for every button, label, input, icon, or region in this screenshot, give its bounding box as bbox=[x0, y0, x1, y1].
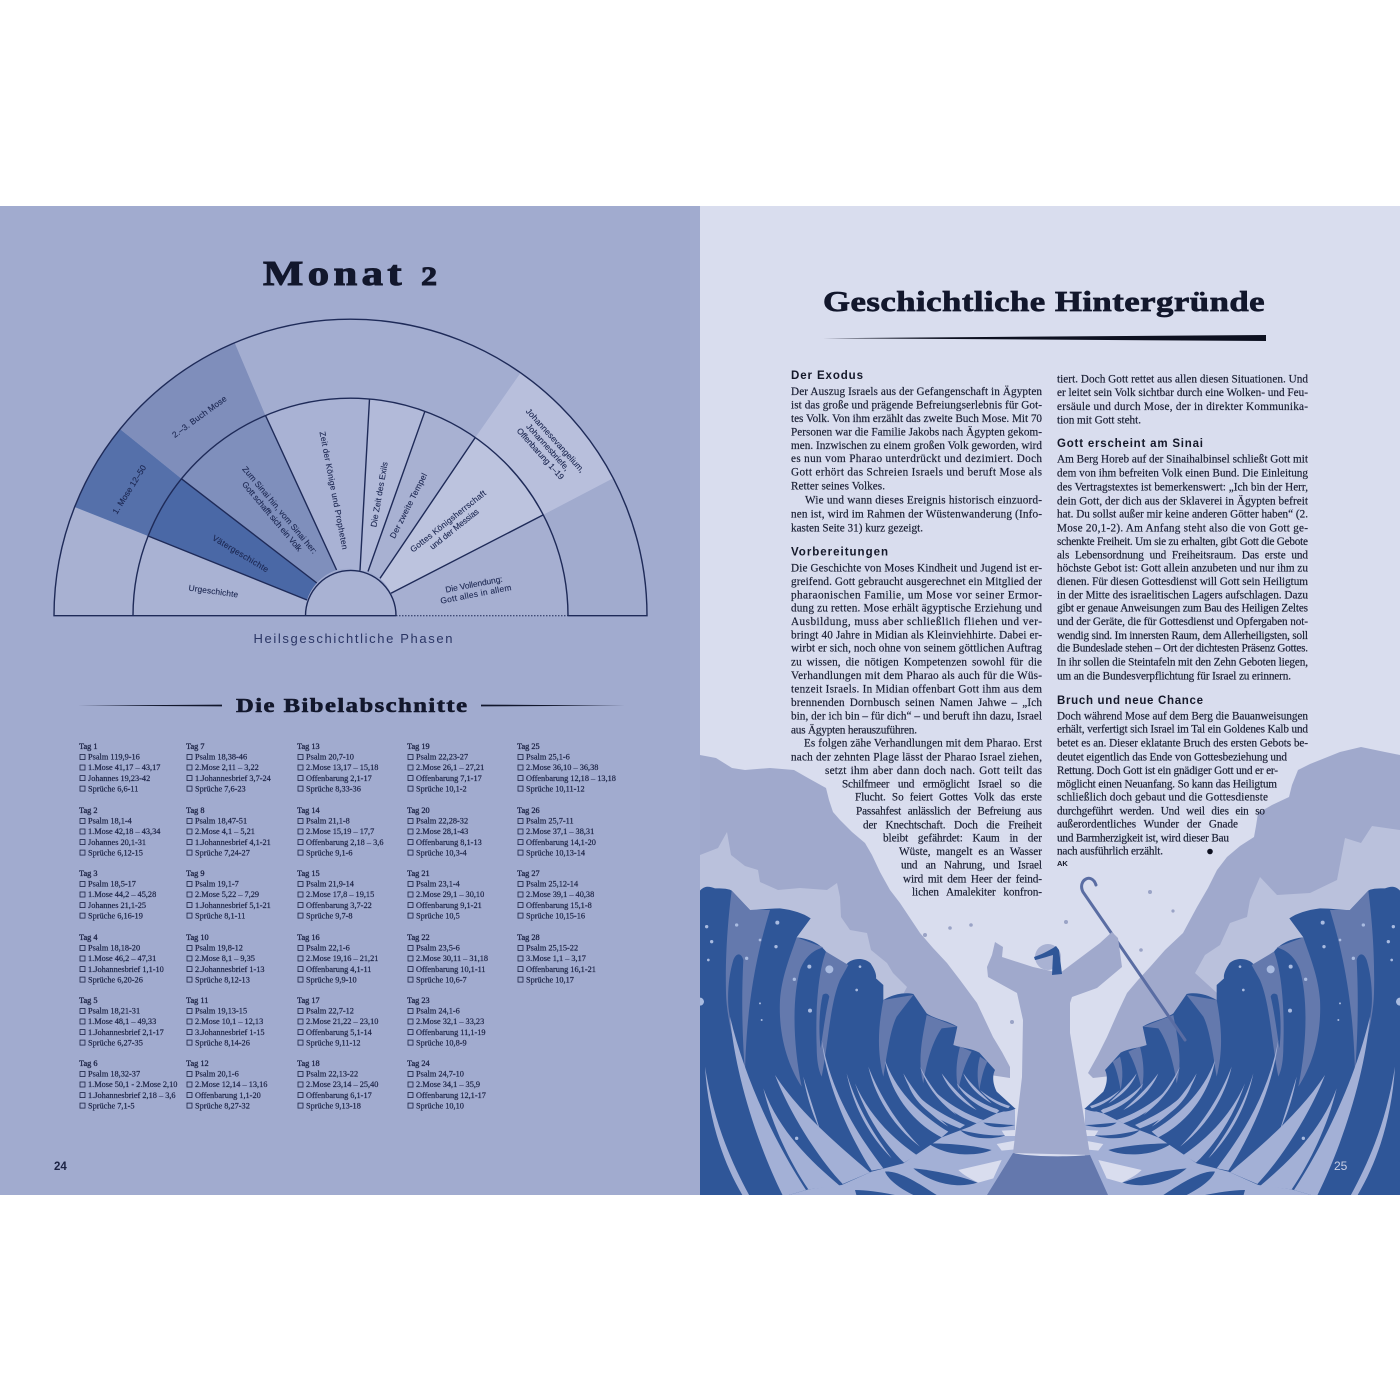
article: Vorbereitungen: Schilfmeer und ermöglicht Israel so die bbox=[842, 778, 1042, 790]
article: Der Exodus: Gott erhört das Schreien Israels und beruft Mose als bbox=[791, 466, 1042, 478]
day 10: Psalm 19,8-12 bbox=[195, 944, 243, 953]
day 23: Offenbarung 11,1-19 bbox=[416, 1028, 486, 1037]
reading list: column 4 bbox=[407, 742, 488, 1110]
subheading: Gott erscheint am Sinai: Gott erscheint am Sinai bbox=[1057, 438, 1203, 450]
day 11: Sprüche 8,14-26 bbox=[195, 1038, 250, 1047]
article: Der Exodus: men. Inzwischen zu einem großen Volk geworden, wird bbox=[791, 440, 1042, 452]
day 18: Psalm 22,13-22 bbox=[306, 1070, 358, 1079]
article: continuation: er leitet sein Volk sichtbar durch eine Wolken- und Feu- bbox=[1057, 387, 1308, 399]
day 13: Tag 13 bbox=[297, 742, 320, 751]
article: Vorbereitungen: zu wissen, die nötigen Kompetenzen sowohl für die bbox=[791, 656, 1042, 668]
day 28: 3.Mose 1,1 – 3,17 bbox=[526, 954, 586, 963]
day 2: 1.Mose 42,18 – 43,34 bbox=[88, 827, 161, 836]
day 25 bbox=[517, 742, 616, 793]
day 9 bbox=[186, 869, 271, 920]
wedge label: Gottes Königsherrschaft: Gottes Königsherrschaft bbox=[408, 487, 488, 554]
article: Gott erscheint am Sinai bbox=[1057, 454, 1309, 682]
article: continuation bbox=[1057, 374, 1308, 426]
day 23 bbox=[407, 996, 486, 1047]
day 2: Tag 2 bbox=[79, 806, 98, 815]
day 14: Offenbarung 2,18 – 3,6 bbox=[306, 838, 384, 847]
day 1: Sprüche 6,6-11 bbox=[88, 784, 138, 793]
day 11: Tag 11 bbox=[186, 996, 208, 1005]
day 16: Sprüche 9,9-10 bbox=[306, 975, 357, 984]
left wave bbox=[696, 887, 1016, 1197]
author initials: AK bbox=[1057, 859, 1068, 868]
day 4: Psalm 18,18-20 bbox=[88, 944, 140, 953]
day 28: Tag 28 bbox=[517, 933, 540, 942]
article: Der Exodus: tes Volk. Von ihm erzählt das zweite Buch Mose. Mit 70 bbox=[791, 413, 1042, 425]
article: Der Exodus: es nun vom Pharao unterdrückt und dezimiert. Doch bbox=[791, 453, 1042, 465]
article: Vorbereitungen: der Knechtschaft. Doch die Freiheit bbox=[863, 820, 1043, 832]
article: Der Exodus: kasten Seite 31) kurz gezeigt. bbox=[791, 522, 923, 534]
title: Monat 2: Monat 2 bbox=[263, 255, 437, 293]
reading list: column 5 bbox=[517, 742, 616, 984]
day 19 bbox=[407, 742, 484, 793]
article: Gott erscheint am Sinai: als Lebensordnung und Freiheitsraum. Das erste und bbox=[1057, 550, 1308, 562]
day 13 bbox=[297, 742, 378, 793]
day 9: Tag 9 bbox=[186, 869, 205, 878]
article: Gott erscheint am Sinai: gibt er genaue Anweisungen zum Bau des Heiligen Zeltes bbox=[1057, 602, 1308, 614]
article: Gott erscheint am Sinai: des Vertragstextes ist bemerkenswert: „Ich bin der Herr, bbox=[1057, 482, 1308, 494]
day 22: Psalm 23,5-6 bbox=[416, 944, 460, 953]
day 4: Sprüche 6,20-26 bbox=[88, 975, 143, 984]
day 4: 1.Mose 46,2 – 47,31 bbox=[88, 954, 156, 963]
article: Vorbereitungen: Die Geschichte von Moses Kindheit und Jugend ist er- bbox=[791, 562, 1042, 574]
day 5: 1.Johannesbrief 2,1-17 bbox=[88, 1028, 164, 1037]
day 26 bbox=[517, 806, 596, 857]
wedge label: Gottes Königsherrschaft: und der Messias bbox=[428, 506, 481, 552]
day 14: Sprüche 9,1-6 bbox=[306, 848, 353, 857]
air spray dots bbox=[923, 890, 1175, 1024]
article: continuation: tion mit Gott steht. bbox=[1057, 414, 1141, 426]
article: Der Exodus: Personen war die Familie Jakobs nach Ägypten gekom- bbox=[791, 426, 1042, 438]
day 5: Tag 5 bbox=[79, 996, 98, 1005]
article: Vorbereitungen: pharaonischen Familie, um Mose vor seiner Ermor- bbox=[791, 590, 1042, 602]
day 12 bbox=[186, 1059, 267, 1110]
day 10: 2.Johannesbrief 1-13 bbox=[195, 965, 265, 974]
day 9: Sprüche 8,1-11 bbox=[195, 911, 245, 920]
wedge label: Johannesevangelium bbox=[509, 406, 587, 488]
day 23: Sprüche 10,8-9 bbox=[416, 1038, 467, 1047]
day 11: 2.Mose 10,1 – 12,13 bbox=[195, 1017, 263, 1026]
article: Vorbereitungen: aus Ägypten herauszuführen. bbox=[791, 724, 917, 736]
day 22: Sprüche 10,6-7 bbox=[416, 975, 467, 984]
day 27: 2.Mose 39,1 – 40,38 bbox=[526, 890, 594, 899]
day 22 bbox=[407, 933, 488, 984]
day 24: Sprüche 10,10 bbox=[416, 1101, 464, 1110]
day 2: Psalm 18,1-4 bbox=[88, 817, 133, 826]
day 17: Offenbarung 5,1-14 bbox=[306, 1028, 373, 1037]
day 10: 2.Mose 8,1 – 9,35 bbox=[195, 954, 255, 963]
day 20: 2.Mose 28,1-43 bbox=[416, 827, 468, 836]
day 5: 1.Mose 48,1 – 49,33 bbox=[88, 1017, 156, 1026]
day 28: Sprüche 10,17 bbox=[526, 975, 574, 984]
outline arcs and spokes bbox=[54, 319, 647, 616]
heading: Geschichtliche Hintergründe bbox=[823, 285, 1266, 341]
day 20 bbox=[407, 806, 482, 857]
day 13: Psalm 20,7-10 bbox=[306, 753, 354, 762]
illustration: parting of the sea bbox=[696, 747, 1400, 1197]
article: Vorbereitungen: Es folgen zähe Verhandlungen mit dem Pharao. Erst bbox=[804, 738, 1043, 750]
article: Vorbereitungen: setzt ihm aber dann doch nach. Gott teilt das bbox=[825, 765, 1042, 777]
article: Der Exodus: Retter seines Volkes. bbox=[791, 480, 885, 492]
day 5: Psalm 18,21-31 bbox=[88, 1007, 140, 1016]
page number 25: 25 bbox=[1334, 1159, 1348, 1173]
article: Bruch und neue Chance: nach ausführlich erzählt. bbox=[1057, 846, 1163, 858]
wedge label: Der zweite Tempel: Der zweite Tempel bbox=[388, 471, 429, 540]
article: Bruch und neue Chance: durchgeführt werden. Und weil dies ein so bbox=[1057, 806, 1265, 818]
article: Vorbereitungen: bleibt gefährdet: Kaum in der bbox=[883, 832, 1042, 844]
article: Vorbereitungen: und an Nahrung, und Israel bbox=[901, 860, 1042, 872]
day 3: Johannes 21,1-25 bbox=[88, 901, 146, 910]
day 3: 1.Mose 44,2 – 45,28 bbox=[88, 890, 156, 899]
heading: Die Bibelabschnitte: Die Bibelabschnitte bbox=[236, 694, 467, 717]
day 9: Psalm 19,1-7 bbox=[195, 880, 239, 889]
day 18: 2.Mose 23,14 – 25,40 bbox=[306, 1080, 378, 1089]
day 10 bbox=[186, 933, 265, 984]
day 28 bbox=[517, 933, 596, 984]
article: Gott erscheint am Sinai: höchste Gebot ist: Gott allein anzubeten und nur ihm zu bbox=[1057, 562, 1308, 574]
day 8: Tag 8 bbox=[186, 806, 205, 815]
article: Vorbereitungen: wird mit dem Heer der feind- bbox=[903, 874, 1042, 886]
day 8 bbox=[186, 806, 271, 857]
day 24 bbox=[407, 1059, 486, 1110]
page background: left page bbox=[0, 206, 700, 1195]
article: Bruch und neue Chance: Rettung. Doch Gott ist ein gnädiger Gott und er er- bbox=[1057, 765, 1278, 777]
wedge label: Vätergeschichte: Vätergeschichte bbox=[211, 533, 271, 574]
article: Bruch und neue Chance: außerordentliches Wunder der Gnade bbox=[1057, 818, 1238, 830]
wedge label: Johannesevangelium: Offenbarung 1–19 bbox=[515, 426, 567, 482]
article: Vorbereitungen bbox=[791, 562, 1043, 898]
day 8: 2.Mose 4,1 – 5,21 bbox=[195, 827, 255, 836]
day 16: Offenbarung 4,1-11 bbox=[306, 965, 371, 974]
day 15: Psalm 21,9-14 bbox=[306, 880, 355, 889]
wedge label: Die Zeit des Exils: Die Zeit des Exils bbox=[368, 461, 390, 528]
day 7: 1.Johannesbrief 3,7-24 bbox=[195, 774, 272, 783]
article: Gott erscheint am Sinai: In ihr sollen die Steintafeln mit den Zehn Geboten liegen, bbox=[1057, 656, 1308, 668]
day 9: 1.Johannesbrief 5,1-21 bbox=[195, 901, 271, 910]
day 7: Sprüche 7,6-23 bbox=[195, 784, 246, 793]
day 17 bbox=[297, 996, 378, 1047]
day 26: Psalm 25,7-11 bbox=[526, 817, 574, 826]
day 17: Tag 17 bbox=[297, 996, 320, 1005]
article: Bruch und neue Chance: möglicht einen Neuanfang. So kann das Heiligtum bbox=[1057, 778, 1277, 790]
day 14: Tag 14 bbox=[297, 806, 321, 815]
day 23: 2.Mose 32,1 – 33,23 bbox=[416, 1017, 484, 1026]
article: Gott erscheint am Sinai: dienen. Für diesen Gottesdienst will Gott sein Heiligtum bbox=[1057, 576, 1308, 588]
text column 1 bbox=[791, 370, 1043, 898]
article: Gott erscheint am Sinai: um an die Bundesverpflichtung für Israel zu erinnern. bbox=[1057, 670, 1291, 682]
day 8: Psalm 18,47-51 bbox=[195, 817, 247, 826]
day 20: Psalm 22,28-32 bbox=[416, 817, 468, 826]
article: Vorbereitungen: Flucht. So feiert Gottes Volk das erste bbox=[855, 792, 1042, 804]
article: Vorbereitungen: wirbt er sich, noch ohne von seinem göttlichen Auftrag bbox=[791, 642, 1042, 654]
day 2: Johannes 20,1-31 bbox=[88, 838, 146, 847]
day 16: Psalm 22,1-6 bbox=[306, 944, 350, 953]
article: Gott erscheint am Sinai: in der Mitte des israelitischen Lagers aufschlagen. Dazu bbox=[1057, 590, 1308, 602]
article: Vorbereitungen: nach der zehnten Plage lässt der Pharao Israel ziehen, bbox=[791, 752, 1042, 764]
day 26: 2.Mose 37,1 – 38,31 bbox=[526, 827, 594, 836]
right cloud bbox=[1088, 747, 1400, 1078]
day 24: Tag 24 bbox=[407, 1059, 431, 1068]
day 19: 2.Mose 26,1 – 27,21 bbox=[416, 763, 484, 772]
wedge label: Zum Sinai: Gott schafft sich ein Volk bbox=[240, 479, 305, 554]
article: Gott erscheint am Sinai: und der Geräte, die für Gottesdienst und Opfergaben not- bbox=[1057, 616, 1308, 628]
day 8: 1.Johannesbrief 4,1-21 bbox=[195, 838, 271, 847]
day 4: Tag 4 bbox=[79, 933, 98, 942]
day 21: Tag 21 bbox=[407, 869, 430, 878]
day 10: Sprüche 8,12-13 bbox=[195, 975, 250, 984]
day 6: 1.Mose 50,1 - 2.Mose 2,10 bbox=[88, 1080, 177, 1089]
article: Gott erscheint am Sinai: dein Gott, der dich aus der Sklaverei in Ägypten befreit bbox=[1057, 496, 1309, 508]
article: Vorbereitungen: dung zu retten. Mose erhält ägyptische Erziehung und bbox=[791, 602, 1042, 614]
article: Bruch und neue Chance: erhält, verfertigt sich Israel im Tal ein Goldenes Kalb und bbox=[1057, 724, 1308, 736]
day 3 bbox=[79, 869, 156, 920]
chart: semicircle of salvation-history phases bbox=[54, 319, 647, 616]
wedge label: 2.–3. Buch Mose: 2.–3. Buch Mose bbox=[170, 393, 229, 440]
article: Gott erscheint am Sinai: die Bundeslade stehen – Ort der dichtesten Präsenz Gottes. bbox=[1057, 642, 1308, 654]
article: Vorbereitungen: bringt 40 Jahre in Midian als Kleinviehhirte. Dabei er- bbox=[791, 630, 1042, 642]
day 21: Sprüche 10,5 bbox=[416, 911, 460, 920]
day 12: Psalm 20,1-6 bbox=[195, 1070, 239, 1079]
day 28: Psalm 25,15-22 bbox=[526, 944, 578, 953]
Moses figure bbox=[987, 932, 1122, 1195]
day 15: 2.Mose 17,8 – 19,15 bbox=[306, 890, 374, 899]
day 10: Tag 10 bbox=[186, 933, 209, 942]
day 22: Tag 22 bbox=[407, 933, 430, 942]
day 19: Tag 19 bbox=[407, 742, 430, 751]
day 19: Psalm 22,23-27 bbox=[416, 753, 468, 762]
right wave bbox=[1084, 887, 1400, 1197]
day 11: 3.Johannesbrief 1-15 bbox=[195, 1028, 265, 1037]
article: Gott erscheint am Sinai: schenkte Freiheit. Um sie zu erhalten, gibt Gott die Gebote bbox=[1057, 536, 1308, 548]
day 24: Psalm 24,7-10 bbox=[416, 1070, 464, 1079]
day 6: Tag 6 bbox=[79, 1059, 98, 1068]
wedge label: Die Vollendung: Gott alles in allem bbox=[439, 582, 512, 606]
day 27: Offenbarung 15,1-8 bbox=[526, 901, 592, 910]
day 5 bbox=[79, 996, 164, 1047]
article: Vorbereitungen: brennenden Dornbusch seinen Namen Jahwe – „Ich bbox=[791, 697, 1042, 709]
day 21 bbox=[407, 869, 484, 920]
day 12: Sprüche 8,27-32 bbox=[195, 1101, 250, 1110]
day 25: Tag 25 bbox=[517, 742, 540, 751]
day 22: Offenbarung 10,1-11 bbox=[416, 965, 486, 974]
day 17: Psalm 22,7-12 bbox=[306, 1007, 354, 1016]
day 19: Offenbarung 7,1-17 bbox=[416, 774, 482, 783]
article: Bruch und neue Chance: betet es an. Dieser eklatante Bruch des ersten Gebots be- bbox=[1057, 738, 1308, 750]
day 8: Sprüche 7,24-27 bbox=[195, 848, 250, 857]
day 18: Offenbarung 6,1-17 bbox=[306, 1091, 372, 1100]
wedge label: 1. Mose 12–50: 1. Mose 12–50 bbox=[110, 463, 148, 516]
day 15 bbox=[297, 869, 374, 920]
day 1: Johannes 19,23-42 bbox=[88, 774, 150, 783]
article: Gott erscheint am Sinai: hat. Du sollst außer mir keine anderen Götter haben“ (2. bbox=[1057, 508, 1308, 520]
day 2: Sprüche 6,12-15 bbox=[88, 848, 143, 857]
day 15: Sprüche 9,7-8 bbox=[306, 911, 353, 920]
day 22: 2.Mose 30,11 – 31,18 bbox=[416, 954, 488, 963]
chart caption: Heilsgeschichtliche Phasen bbox=[254, 631, 452, 646]
day 21: 2.Mose 29,1 – 30,10 bbox=[416, 890, 484, 899]
subheading: Bruch und neue Chance: Bruch und neue Chance bbox=[1057, 695, 1203, 707]
text column 2 bbox=[1057, 374, 1309, 868]
day 12: Offenbarung 1,1-20 bbox=[195, 1091, 261, 1100]
day 27: Tag 27 bbox=[517, 869, 540, 878]
article: Vorbereitungen: Verhandlungen mit dem Pharao als auch für die Wüs- bbox=[791, 670, 1042, 682]
article: Bruch und neue Chance: Doch während Mose auf dem Berg die Bauanweisungen bbox=[1057, 710, 1308, 722]
article: Vorbereitungen: Ausbildung, muss aber schließlich fliehen und ver- bbox=[791, 616, 1042, 628]
day 6: Psalm 18,32-37 bbox=[88, 1070, 140, 1079]
wedge label: Johannesevangelium: Johannesevangelium, bbox=[524, 406, 587, 474]
day 1: Tag 1 bbox=[79, 742, 98, 751]
page number 24: 24 bbox=[54, 1161, 67, 1173]
day 25: Psalm 25,1-6 bbox=[526, 753, 570, 762]
wedge label: Zeit der Könige und Propheten: Zeit der Könige und Propheten bbox=[318, 431, 350, 551]
day 15: Tag 15 bbox=[297, 869, 320, 878]
article: Der Exodus: nen ist, wird im Rahmen der Wüstenwanderung (Info- bbox=[791, 508, 1042, 520]
day 7 bbox=[186, 742, 272, 793]
reading list: column 1 bbox=[79, 742, 177, 1110]
day 17: Sprüche 9,11-12 bbox=[306, 1038, 361, 1047]
outer band wedges bbox=[54, 319, 647, 616]
wedge label: Urgeschichte: Urgeschichte bbox=[188, 583, 239, 600]
article: Der Exodus: ist das große und prägende Befreiungserlebnis für Got- bbox=[791, 400, 1042, 412]
day 12: 2.Mose 12,14 – 13,16 bbox=[195, 1080, 267, 1089]
day 25: Sprüche 10,11-12 bbox=[526, 784, 585, 793]
end mark bbox=[1207, 849, 1213, 854]
day 14: Psalm 21,1-8 bbox=[306, 817, 350, 826]
day 2 bbox=[79, 806, 161, 857]
day 16 bbox=[297, 933, 378, 984]
day 3: Tag 3 bbox=[79, 869, 98, 878]
article: continuation: tiert. Doch Gott rettet aus allen diesen Situationen. Und bbox=[1057, 374, 1308, 386]
day 1: Psalm 119,9-16 bbox=[88, 753, 140, 762]
article: continuation: ersäule und durch Mose, der in direkter Kommunika- bbox=[1057, 401, 1308, 413]
day 6: Sprüche 7,1-5 bbox=[88, 1101, 135, 1110]
article: Gott erscheint am Sinai: dem von ihm befreiten Volk einen Bund. Die Einleitung bbox=[1057, 468, 1308, 480]
day 20: Sprüche 10,3-4 bbox=[416, 848, 468, 857]
day 14: 2.Mose 15,19 – 17,7 bbox=[306, 827, 374, 836]
day 24: 2.Mose 34,1 – 35,9 bbox=[416, 1080, 480, 1089]
day 24: Offenbarung 12,1-17 bbox=[416, 1091, 486, 1100]
day 5: Sprüche 6,27-35 bbox=[88, 1038, 143, 1047]
article: Vorbereitungen: tenzeit Israels. In Midian offenbart Gott ihm aus dem bbox=[791, 684, 1042, 696]
day 23: Psalm 24,1-6 bbox=[416, 1007, 460, 1016]
day 20: Offenbarung 8,1-13 bbox=[416, 838, 482, 847]
subheading: Vorbereitungen: Vorbereitungen bbox=[791, 546, 888, 558]
article: Vorbereitungen: Passahfest anlässlich der Befreiung aus bbox=[856, 806, 1042, 818]
day 6 bbox=[79, 1059, 177, 1110]
day 18 bbox=[297, 1059, 378, 1110]
article: Der Exodus: Der Auszug Israels aus der Gefangenschaft in Ägypten bbox=[791, 386, 1042, 398]
day 1 bbox=[79, 742, 160, 793]
article: Der Exodus: Wie und wann dieses Ereignis historisch einzuord- bbox=[805, 494, 1042, 506]
day 20: Tag 20 bbox=[407, 806, 430, 815]
article: Vorbereitungen: Wüste, mangelt es an Wasser bbox=[899, 846, 1042, 858]
day 3: Sprüche 6,16-19 bbox=[88, 911, 143, 920]
day 17: 2.Mose 21,22 – 23,10 bbox=[306, 1017, 378, 1026]
day 16: 2.Mose 19,16 – 21,21 bbox=[306, 954, 378, 963]
day 23: Tag 23 bbox=[407, 996, 430, 1005]
left cloud bbox=[700, 755, 1010, 1078]
day 1: 1.Mose 41,17 – 43,17 bbox=[88, 763, 160, 772]
day 15: Offenbarung 3,7-22 bbox=[306, 901, 372, 910]
article: Bruch und neue Chance: schließlich doch gebaut und die Gottesdienste bbox=[1057, 792, 1268, 804]
day 27 bbox=[517, 869, 594, 920]
day 4: 1.Johannesbrief 1,1-10 bbox=[88, 965, 164, 974]
day 18: Sprüche 9,13-18 bbox=[306, 1101, 361, 1110]
staff bbox=[1082, 878, 1185, 1040]
day 27: Psalm 25,12-14 bbox=[526, 880, 579, 889]
day 18: Tag 18 bbox=[297, 1059, 320, 1068]
wedge label: Zum Sinai: Zum Sinai hin, vom Sinai her: bbox=[240, 464, 319, 556]
wedge label: Die Vollendung: Die Vollendung: bbox=[444, 574, 503, 595]
article: Bruch und neue Chance bbox=[1057, 710, 1308, 858]
day 11 bbox=[186, 996, 265, 1047]
reading list: column 3 bbox=[297, 742, 384, 1110]
day 21: Psalm 23,1-4 bbox=[416, 880, 461, 889]
day 19: Sprüche 10,1-2 bbox=[416, 784, 467, 793]
day 26: Tag 26 bbox=[517, 806, 540, 815]
day 6: 1.Johannesbrief 2,18 – 3,6 bbox=[88, 1091, 176, 1100]
article: Vorbereitungen: lichen Amalekiter konfron- bbox=[912, 886, 1042, 898]
article: Gott erscheint am Sinai: Am Berg Horeb auf der Sinaihalbinsel schließt Gott mit bbox=[1057, 454, 1309, 466]
day 13: Sprüche 8,33-36 bbox=[306, 784, 361, 793]
day 9: 2.Mose 5,22 – 7,29 bbox=[195, 890, 259, 899]
day 14 bbox=[297, 806, 384, 857]
day 7: 2.Mose 2,11 – 3,22 bbox=[195, 763, 259, 772]
day 26: Sprüche 10,13-14 bbox=[526, 848, 586, 857]
day 12: Tag 12 bbox=[186, 1059, 209, 1068]
article: Der Exodus bbox=[791, 386, 1042, 534]
day 13: 2.Mose 13,17 – 15,18 bbox=[306, 763, 378, 772]
subheading: Der Exodus: Der Exodus bbox=[791, 370, 863, 382]
inner phase wedges bbox=[133, 398, 568, 616]
day 27: Sprüche 10,15-16 bbox=[526, 911, 585, 920]
article: Vorbereitungen: bin, der ich bin – für dich“ – und beruft ihn dazu, Israel bbox=[791, 710, 1042, 722]
day 25: 2.Mose 36,10 – 36,38 bbox=[526, 763, 598, 772]
wedge label: Die Vollendung bbox=[438, 572, 512, 606]
day 16: Tag 16 bbox=[297, 933, 320, 942]
day 11: Psalm 19,13-15 bbox=[195, 1007, 247, 1016]
article: Vorbereitungen: greifend. Gott gebraucht ausgerechnet ein Mitglied der bbox=[791, 576, 1042, 588]
day 28: Offenbarung 16,1-21 bbox=[526, 965, 596, 974]
day 7: Psalm 18,38-46 bbox=[195, 753, 247, 762]
day 25: Offenbarung 12,18 – 13,18 bbox=[526, 774, 616, 783]
article: Gott erscheint am Sinai: wendig sind. Im innersten Raum, dem Allerheiligsten, soll bbox=[1057, 630, 1308, 642]
article: Bruch und neue Chance: und Barmherzigkeit ist, wird dieser Bau bbox=[1057, 832, 1229, 844]
heading: Geschichtliche Hintergründe: Geschichtliche Hintergründe bbox=[823, 285, 1265, 317]
page background: right page bbox=[700, 206, 1400, 1195]
day 26: Offenbarung 14,1-20 bbox=[526, 838, 596, 847]
day 13: Offenbarung 2,1-17 bbox=[306, 774, 372, 783]
day 3: Psalm 18,5-17 bbox=[88, 880, 136, 889]
day 7: Tag 7 bbox=[186, 742, 205, 751]
wedge label: Johannesevangelium: Johannesbriefe, bbox=[524, 421, 572, 473]
article: Bruch und neue Chance: deutet eigentlich das Ende von Gottesbeziehung und bbox=[1057, 752, 1287, 764]
reading list: column 2 bbox=[186, 742, 272, 1110]
day 21: Offenbarung 9,1-21 bbox=[416, 901, 482, 910]
article: Gott erscheint am Sinai: Mose 20,1-2). Am Anfang steht also die von Gott ge- bbox=[1057, 522, 1308, 534]
day 4 bbox=[79, 933, 164, 984]
